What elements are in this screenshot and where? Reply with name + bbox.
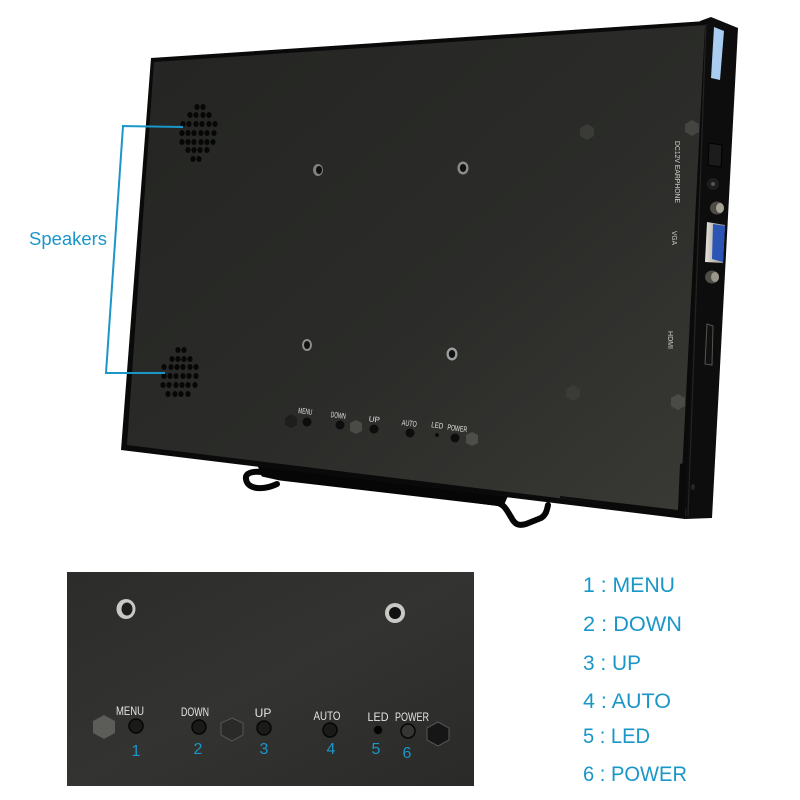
speakers bracket (106, 126, 183, 373)
button legend: 5 : LED (583, 725, 650, 748)
button labels: AUTO (401, 418, 417, 429)
close-up numbers: 1 (132, 743, 141, 760)
side port labels: HDMI (666, 331, 675, 349)
hdmi port (705, 324, 713, 365)
close-up numbers: 2 (194, 741, 203, 758)
close-up button labels: AUTO (314, 709, 340, 723)
close-up numbers: 5 (372, 741, 381, 758)
hex stickers (285, 120, 699, 446)
close-up button labels: UP (255, 706, 271, 720)
vga connector (705, 202, 725, 284)
side port labels: DC12V EARPHONE (673, 141, 682, 203)
close-up screws (116, 599, 405, 623)
button labels: POWER (447, 423, 468, 434)
speakers label: Speakers (29, 228, 107, 249)
close-up buttons (129, 719, 415, 738)
button labels: LED (431, 420, 444, 431)
side screw (691, 484, 695, 490)
earphone jack (707, 178, 719, 190)
button legend: 2 : DOWN (583, 613, 682, 636)
button legend: 6 : POWER (583, 763, 687, 786)
side port labels: VGA (670, 231, 679, 245)
close-up numbers: 3 (260, 741, 269, 758)
close-up button labels (116, 704, 429, 724)
panel corner shadow (560, 463, 684, 514)
speaker grille top (179, 104, 218, 162)
mounting screws (302, 162, 468, 360)
panel: button close-up (67, 572, 474, 786)
button legend: 3 : UP (583, 652, 641, 675)
side port labels (666, 141, 682, 349)
close-up numbers (132, 741, 412, 762)
button legend (583, 574, 687, 786)
back panel (127, 25, 705, 513)
button legend: 1 : MENU (583, 574, 675, 597)
power jack (708, 143, 722, 167)
monitor side face (685, 17, 738, 519)
close-up button labels: POWER (395, 710, 429, 724)
button labels: DOWN (330, 410, 346, 421)
button legend: 4 : AUTO (583, 690, 671, 713)
button labels (298, 406, 468, 434)
close-up button labels: LED (368, 710, 389, 724)
monitor frame (121, 21, 706, 519)
close-up numbers: 4 (327, 741, 336, 758)
close-up button labels: DOWN (181, 705, 209, 719)
button labels: MENU (298, 406, 313, 417)
speaker grille bottom (160, 347, 199, 397)
monitor (121, 17, 738, 525)
close-up background (67, 572, 474, 786)
close-up button labels: MENU (116, 704, 144, 718)
close-up hex stickers (93, 715, 449, 746)
button labels: UP (368, 414, 380, 425)
stand (246, 460, 548, 525)
close-up numbers: 6 (403, 745, 412, 762)
serial sticker (711, 27, 724, 80)
front panel buttons (302, 418, 460, 442)
frame edge highlight (688, 24, 706, 516)
